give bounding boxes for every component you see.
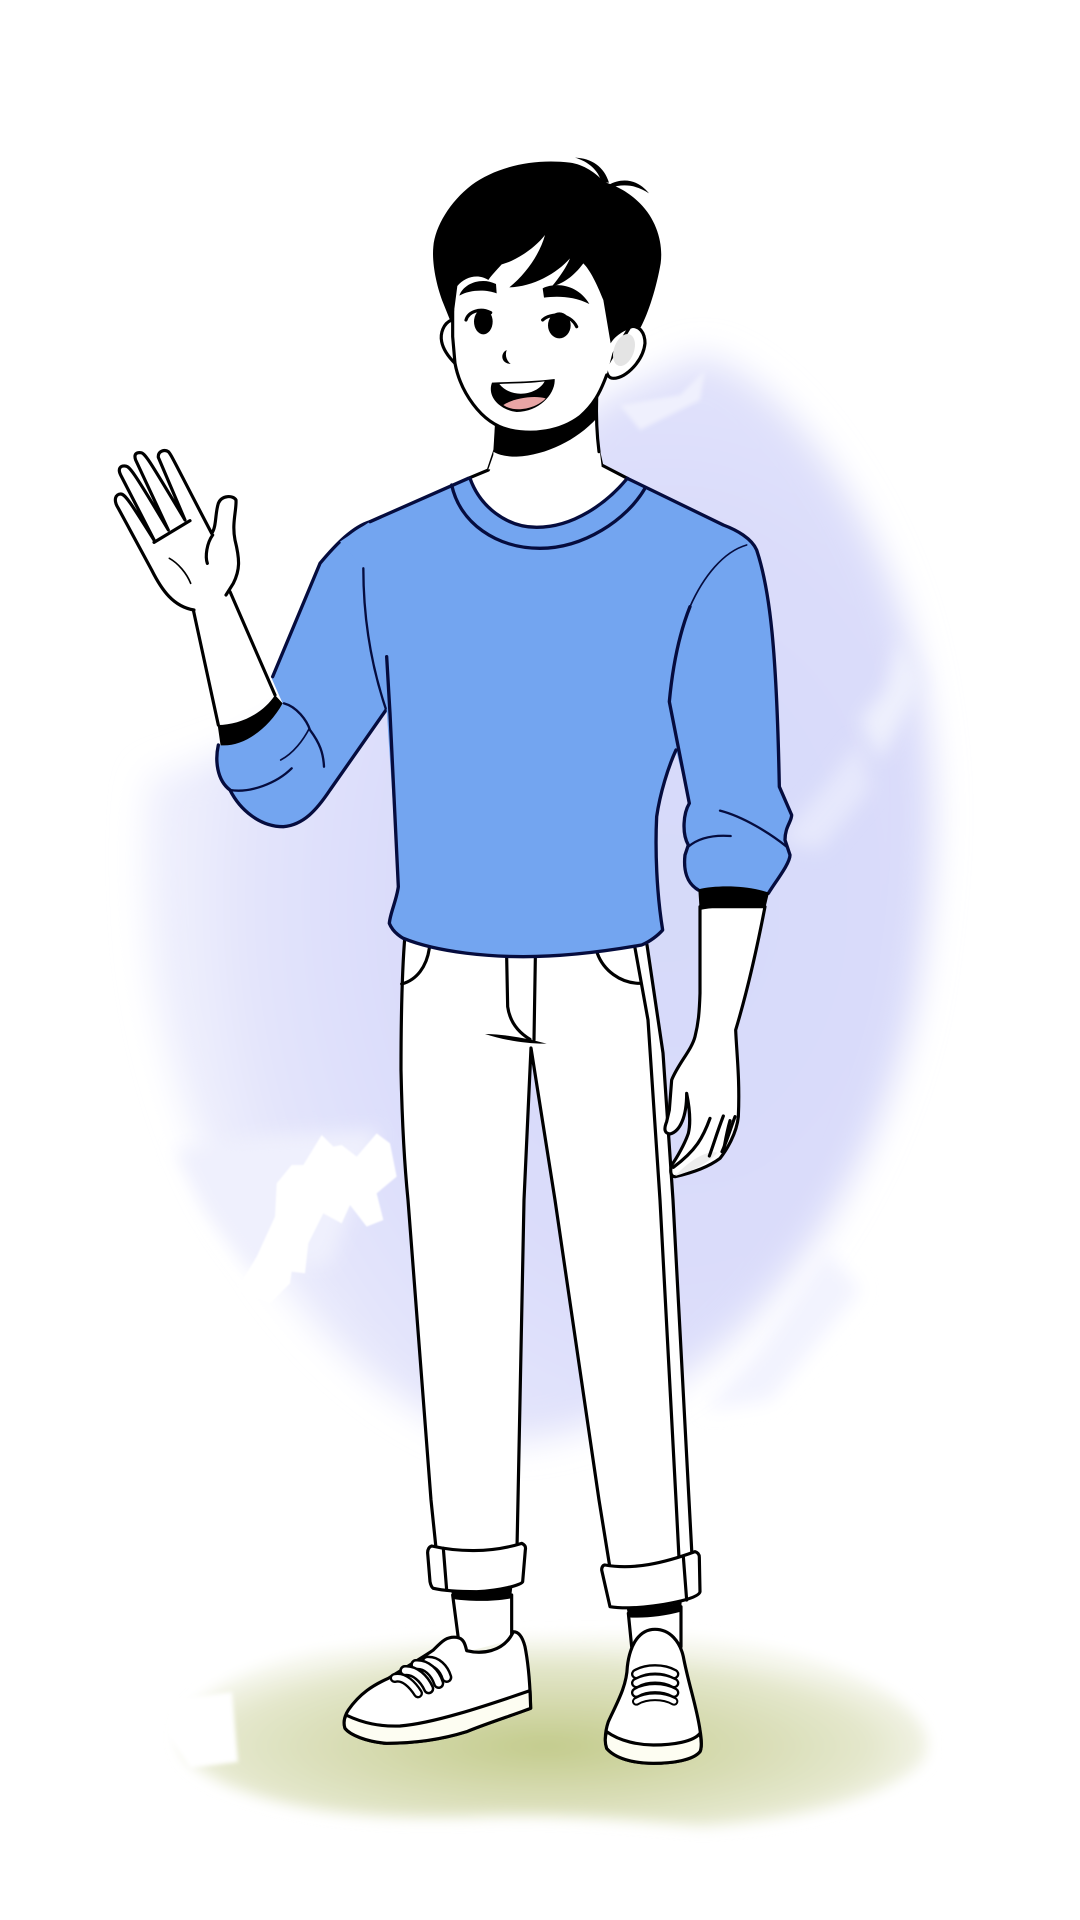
trouser cuffs <box>428 1543 700 1608</box>
right forearm and hand <box>665 907 765 1177</box>
collar <box>470 478 627 527</box>
blue sweater <box>340 450 792 957</box>
thumb and palm creases <box>206 535 213 563</box>
left leg outer seam <box>401 935 436 1548</box>
sock band <box>451 1587 512 1601</box>
head <box>433 158 661 469</box>
shoe laces <box>636 1669 674 1701</box>
finger lines <box>673 1118 710 1167</box>
right leg outer seam <box>647 945 692 1556</box>
left sleeve <box>217 505 410 827</box>
inner leg seams <box>517 1048 610 1568</box>
hair wisps <box>575 158 609 183</box>
shoe body <box>605 1629 701 1763</box>
left shoe and ankle <box>344 1587 531 1743</box>
finger shading <box>675 1152 717 1176</box>
background: lavender watercolor blob <box>146 355 933 1441</box>
face <box>453 257 615 432</box>
pockets and fly <box>402 948 640 1044</box>
sleeve outline <box>273 522 370 677</box>
right cuff folds <box>720 811 787 847</box>
neck upper <box>488 393 602 469</box>
shoe sole <box>344 1691 531 1743</box>
underarm crease <box>363 568 386 708</box>
torso outline and hem <box>387 657 676 957</box>
right undersleeve band <box>698 886 769 910</box>
hair <box>433 162 661 343</box>
shoe laces <box>395 1661 447 1693</box>
side stripe <box>635 948 679 1558</box>
mouth <box>491 379 555 412</box>
palm line <box>154 521 190 542</box>
shoe sole <box>605 1732 701 1763</box>
white trousers <box>401 935 692 1568</box>
shoe body <box>344 1632 531 1743</box>
left ear <box>441 320 455 363</box>
sock band <box>627 1602 682 1618</box>
black undersleeve band <box>218 695 283 746</box>
hand with fingers <box>115 451 239 610</box>
shoulders <box>370 478 468 522</box>
cuff folds <box>284 703 324 767</box>
eyes <box>474 309 493 334</box>
neck shadow <box>493 393 597 457</box>
raised left forearm and waving hand <box>115 451 283 746</box>
eyebrows <box>459 281 497 296</box>
background: olive ground patch <box>168 1636 927 1826</box>
right ear <box>606 326 645 378</box>
right arm seam <box>690 545 747 607</box>
neck <box>470 450 627 527</box>
nose <box>502 350 511 364</box>
right shoe and ankle <box>605 1602 701 1763</box>
